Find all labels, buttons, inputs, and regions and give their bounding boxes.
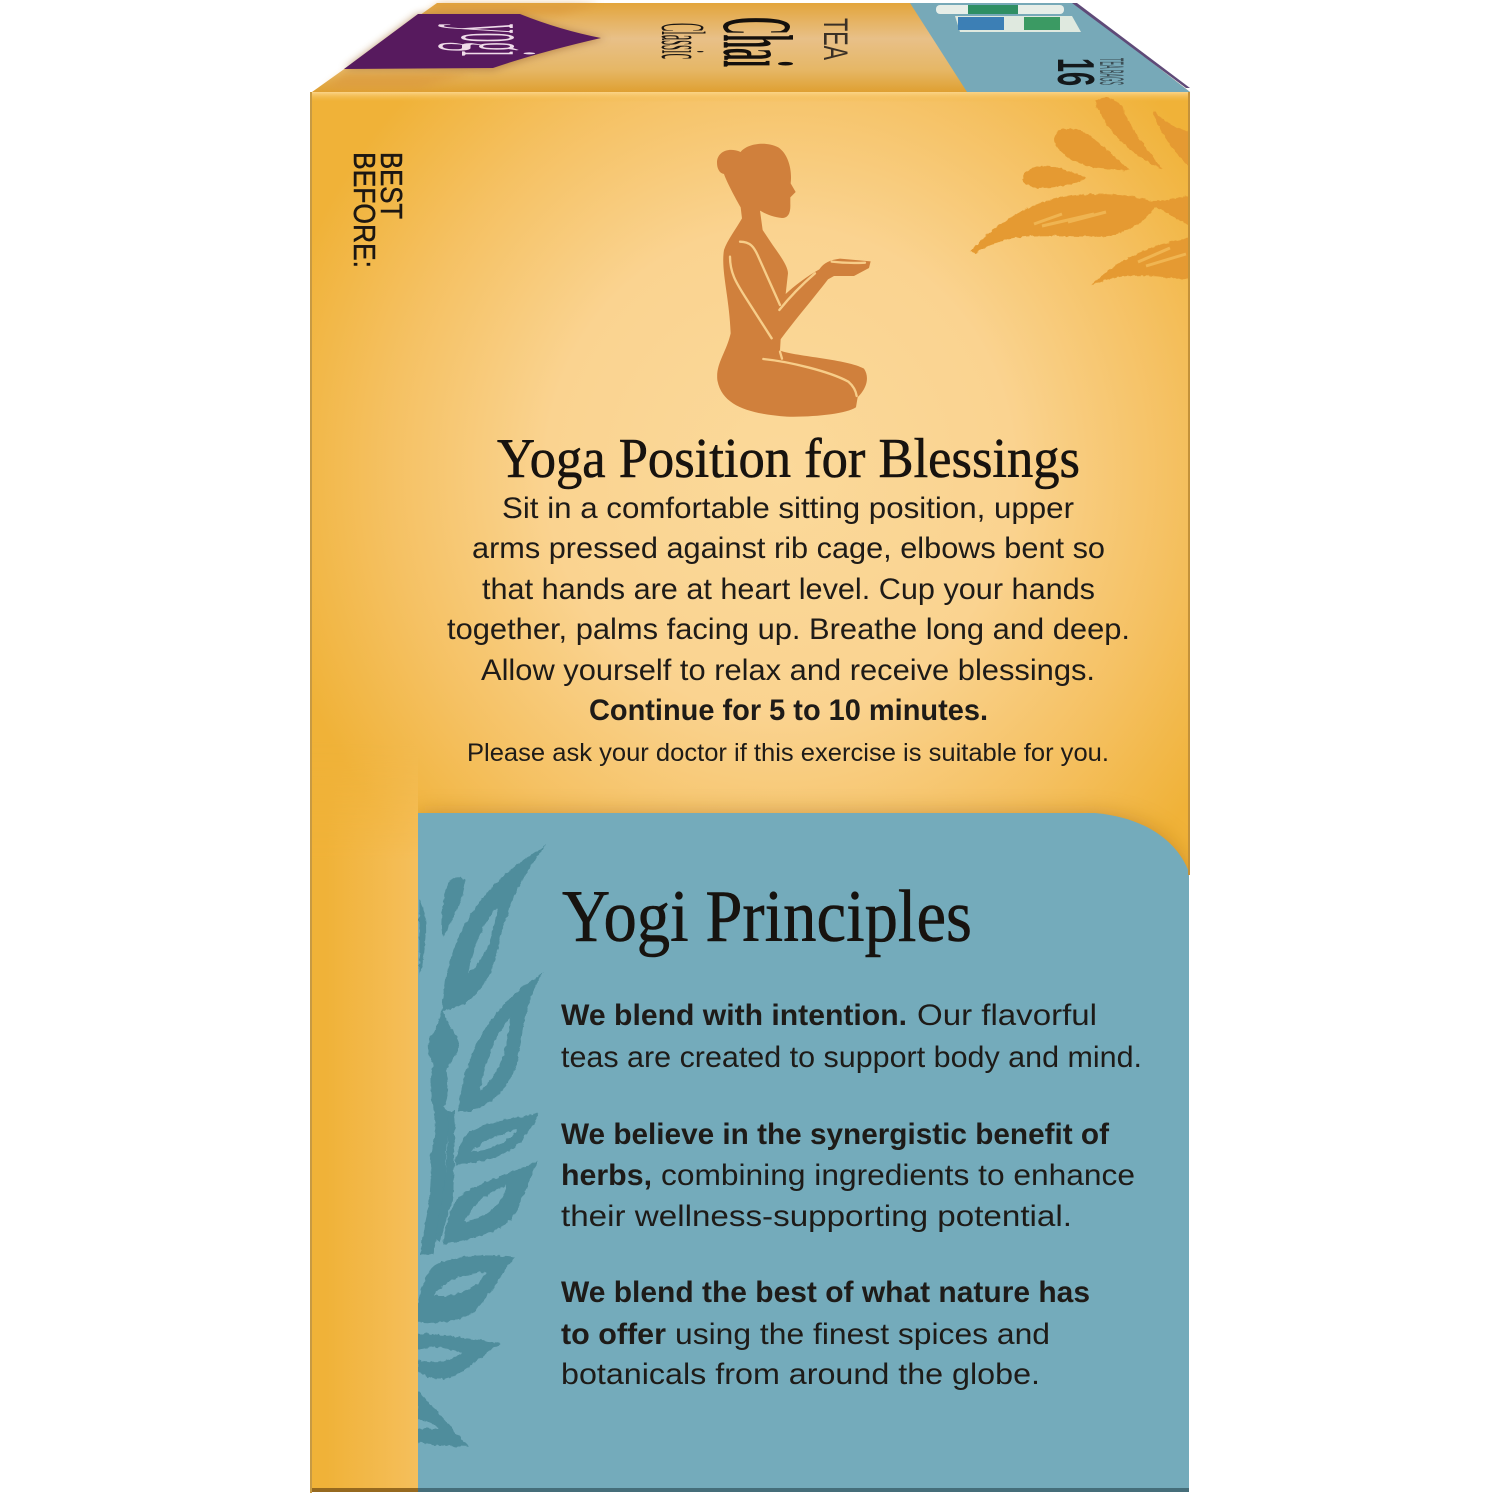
box left edge: [310, 92, 312, 1493]
bottom edge: [312, 1488, 418, 1492]
text block: principle two: herbs,: [561, 1159, 652, 1192]
text block: principle two: combining ingredients to enhance: [661, 1159, 1135, 1192]
text block: principle one: teas are created to support body and mind.: [561, 1041, 1142, 1074]
heading: yogi principles: Yogi Principles: [562, 876, 972, 958]
text: TEA BAGS: [1092, 58, 1130, 85]
text block: yoga instructions: Continue for 5 to 10 minutes.: [589, 694, 988, 727]
text block: yoga instructions: Please ask your doctor if this exercise is suitable for you.: [467, 739, 1109, 767]
text block: yoga instructions: Sit in a comfortable sitting position, upper: [502, 492, 1074, 525]
text block: yoga instructions: together, palms facing up. Breathe long and deep.: [447, 613, 1130, 646]
certification seals: [936, 5, 1081, 32]
text block: principle three: We blend the best of what nature has: [561, 1276, 1090, 1309]
text block: yoga instructions: that hands are at heart level. Cup your hands: [482, 573, 1095, 606]
orange leaf decoration: [970, 98, 1193, 285]
tea label: TEA: [816, 18, 854, 60]
text block: principle two: their wellness-supporting potential.: [561, 1200, 1072, 1233]
heading: yoga position: Yoga Position for Blessings: [497, 428, 1080, 490]
box top face: [312, 3, 1190, 92]
text block: principle one: [561, 999, 1142, 1074]
text: Chai: [702, 17, 813, 67]
box front face: [312, 92, 1193, 1500]
figure highlight lines: [730, 242, 865, 396]
best before label: [347, 152, 409, 268]
text block: principle three: [561, 1276, 1090, 1391]
banner shadow: [344, 14, 606, 70]
text block: principle three: using the finest spices and: [675, 1318, 1050, 1351]
purple yogi banner: [344, 14, 601, 69]
teal panel: [418, 813, 1190, 1492]
best before label: BEFORE:: [347, 152, 382, 268]
text block: principle one: Our flavorful: [917, 999, 1097, 1032]
top lip highlight: [312, 92, 1188, 99]
text block: principle three: to offer: [561, 1318, 666, 1351]
box top face: 16: [1046, 58, 1104, 86]
text: Classic: [648, 23, 716, 59]
text block: principle two: [561, 1118, 1135, 1233]
text block: yoga instructions: arms pressed against rib cage, elbows bent so: [472, 532, 1105, 565]
best before label: BEST: [374, 152, 409, 219]
teal section of top: [910, 3, 1190, 92]
text block: principle two: We believe in the synergistic benefit of: [561, 1118, 1110, 1151]
leaf veins: [1034, 212, 1186, 266]
text block: yoga instructions: Allow yourself to relax and receive blessings.: [481, 654, 1095, 687]
purple edge of top: [1072, 3, 1190, 88]
teal panel shadow: [418, 802, 1188, 869]
teal leaf decoration: [417, 846, 546, 1447]
ornament on top face: [325, 4, 600, 88]
text block: principle one: We blend with intention.: [561, 999, 907, 1032]
box right edge: [1188, 92, 1190, 875]
icon: seated yoga figure: [717, 144, 871, 417]
lower strip light: [346, 788, 418, 1488]
text block: yoga instructions: [447, 492, 1130, 767]
text: yogi: [438, 24, 560, 56]
text block: principle three: botanicals from around the globe.: [561, 1358, 1040, 1391]
